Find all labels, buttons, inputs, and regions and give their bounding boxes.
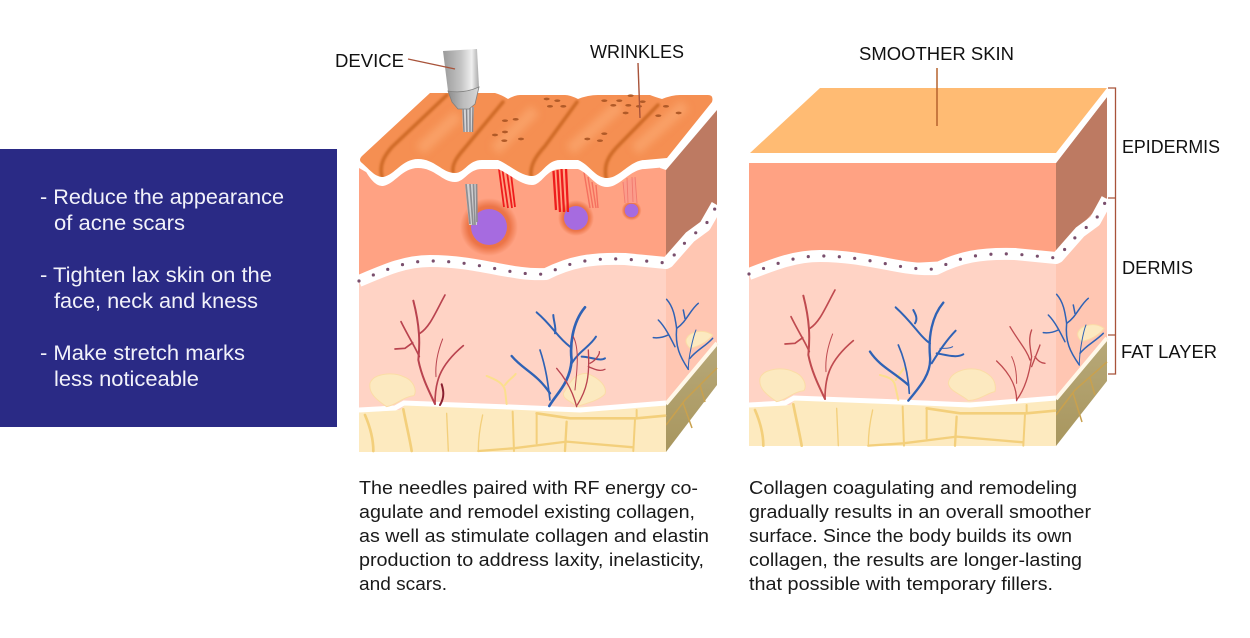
thermal zone: large — [460, 198, 518, 256]
thermal zone: medium — [558, 200, 594, 236]
dermis-fat boundary — [359, 403, 666, 410]
text block: treatment description: The needles paired with RF energy co- — [359, 478, 698, 498]
skin diagram: smoother skin after treatment — [749, 68, 1116, 446]
label: fat layer: FAT LAYER — [1121, 342, 1217, 362]
red blood vessel: centre — [557, 337, 605, 407]
label: smoother skin: SMOOTHER SKIN — [859, 44, 1014, 64]
needle channels: pale — [623, 177, 637, 203]
benefit: tighten skin — [40, 263, 272, 313]
needle channels: red — [499, 168, 568, 212]
side face: epidermis — [1056, 97, 1107, 252]
benefit: tighten skin: - Tighten lax skin on the — [40, 263, 272, 287]
front: epidermis — [749, 163, 1056, 272]
text block: result description: that possible with temporary fillers. — [749, 574, 1053, 594]
white rim under surface — [359, 95, 717, 187]
label: device: DEVICE — [335, 51, 404, 71]
needles in skin: grey — [465, 184, 477, 225]
benefit: stretch marks: - Make stretch marks — [40, 341, 245, 365]
orange surface — [360, 93, 712, 178]
thermal zone: small — [622, 200, 642, 220]
front: fat layer — [359, 405, 666, 452]
blue blood vessel — [870, 303, 963, 401]
side face: fat layer — [666, 343, 717, 452]
dermis-fat boundary — [749, 398, 1056, 405]
yellow nerve — [487, 374, 516, 404]
text block: treatment description: and scars. — [359, 574, 447, 594]
blue blood vessel — [512, 307, 605, 406]
front: dermis — [749, 254, 1056, 405]
front: epidermis — [359, 160, 666, 285]
treatment zones and needles — [460, 168, 642, 256]
surface pores — [492, 94, 682, 142]
surface highlights — [420, 105, 685, 150]
text block: treatment description: production to address laxity, inelasticity, — [359, 550, 704, 570]
leader line: smoother skin — [936, 68, 938, 126]
leader line: wrinkles — [638, 63, 640, 118]
text block: result description: Collagen coagulating and remodeling — [749, 478, 1077, 498]
benefit: acne scars: of acne scars — [54, 211, 185, 235]
text block: result description: gradually results in an overall smoother — [749, 502, 1091, 522]
text block: result description: surface. Since the body builds its own — [749, 526, 1072, 546]
smooth top surface — [750, 88, 1107, 153]
benefit: acne scars: - Reduce the appearance — [40, 185, 284, 209]
side face: dermis — [666, 205, 717, 404]
benefit: stretch marks: less noticeable — [54, 367, 199, 391]
side face: dermis — [1056, 198, 1107, 399]
side face: fat layer — [1056, 338, 1107, 446]
label: dermis: DERMIS — [1122, 258, 1193, 278]
text block: treatment description: agulate and remodel existing collagen, — [359, 502, 695, 522]
fat globules — [760, 325, 1104, 402]
basement membrane band — [749, 199, 1107, 274]
red blood vessel: right — [997, 327, 1045, 401]
text block: result description: collagen, the results are longer-lasting — [749, 550, 1082, 570]
leader line: device — [408, 59, 455, 69]
fat globules — [370, 331, 713, 407]
red blood vessel: left — [395, 295, 463, 405]
needle channels: fading — [584, 172, 598, 208]
benefit: acne scars — [40, 185, 284, 235]
yellow nerve — [880, 368, 904, 400]
blue blood vessel: side — [653, 299, 713, 369]
skin diagram: treated skin with device — [359, 49, 717, 452]
layer bracket — [1108, 88, 1116, 374]
benefit: tighten skin: face, neck and kness — [54, 289, 258, 313]
panel: benefits list — [0, 149, 337, 427]
red blood vessel: left — [785, 290, 853, 399]
label: wrinkles: WRINKLES — [590, 42, 684, 62]
blue blood vessel: side — [1043, 294, 1103, 365]
device handpiece — [443, 49, 479, 132]
label: epidermis: EPIDERMIS — [1122, 137, 1220, 157]
front: fat layer — [749, 400, 1056, 446]
text block: result description — [749, 478, 1091, 594]
text block: treatment description: as well as stimulate collagen and elastin — [359, 526, 709, 546]
basement membrane band — [359, 205, 717, 281]
wavy wrinkled skin surface — [359, 93, 717, 187]
wrinkle grooves — [381, 95, 658, 178]
benefit: stretch marks — [40, 341, 245, 391]
white top rim — [749, 88, 1107, 163]
front: dermis — [359, 259, 666, 410]
text block: treatment description — [359, 478, 709, 594]
side face: epidermis — [666, 103, 717, 262]
